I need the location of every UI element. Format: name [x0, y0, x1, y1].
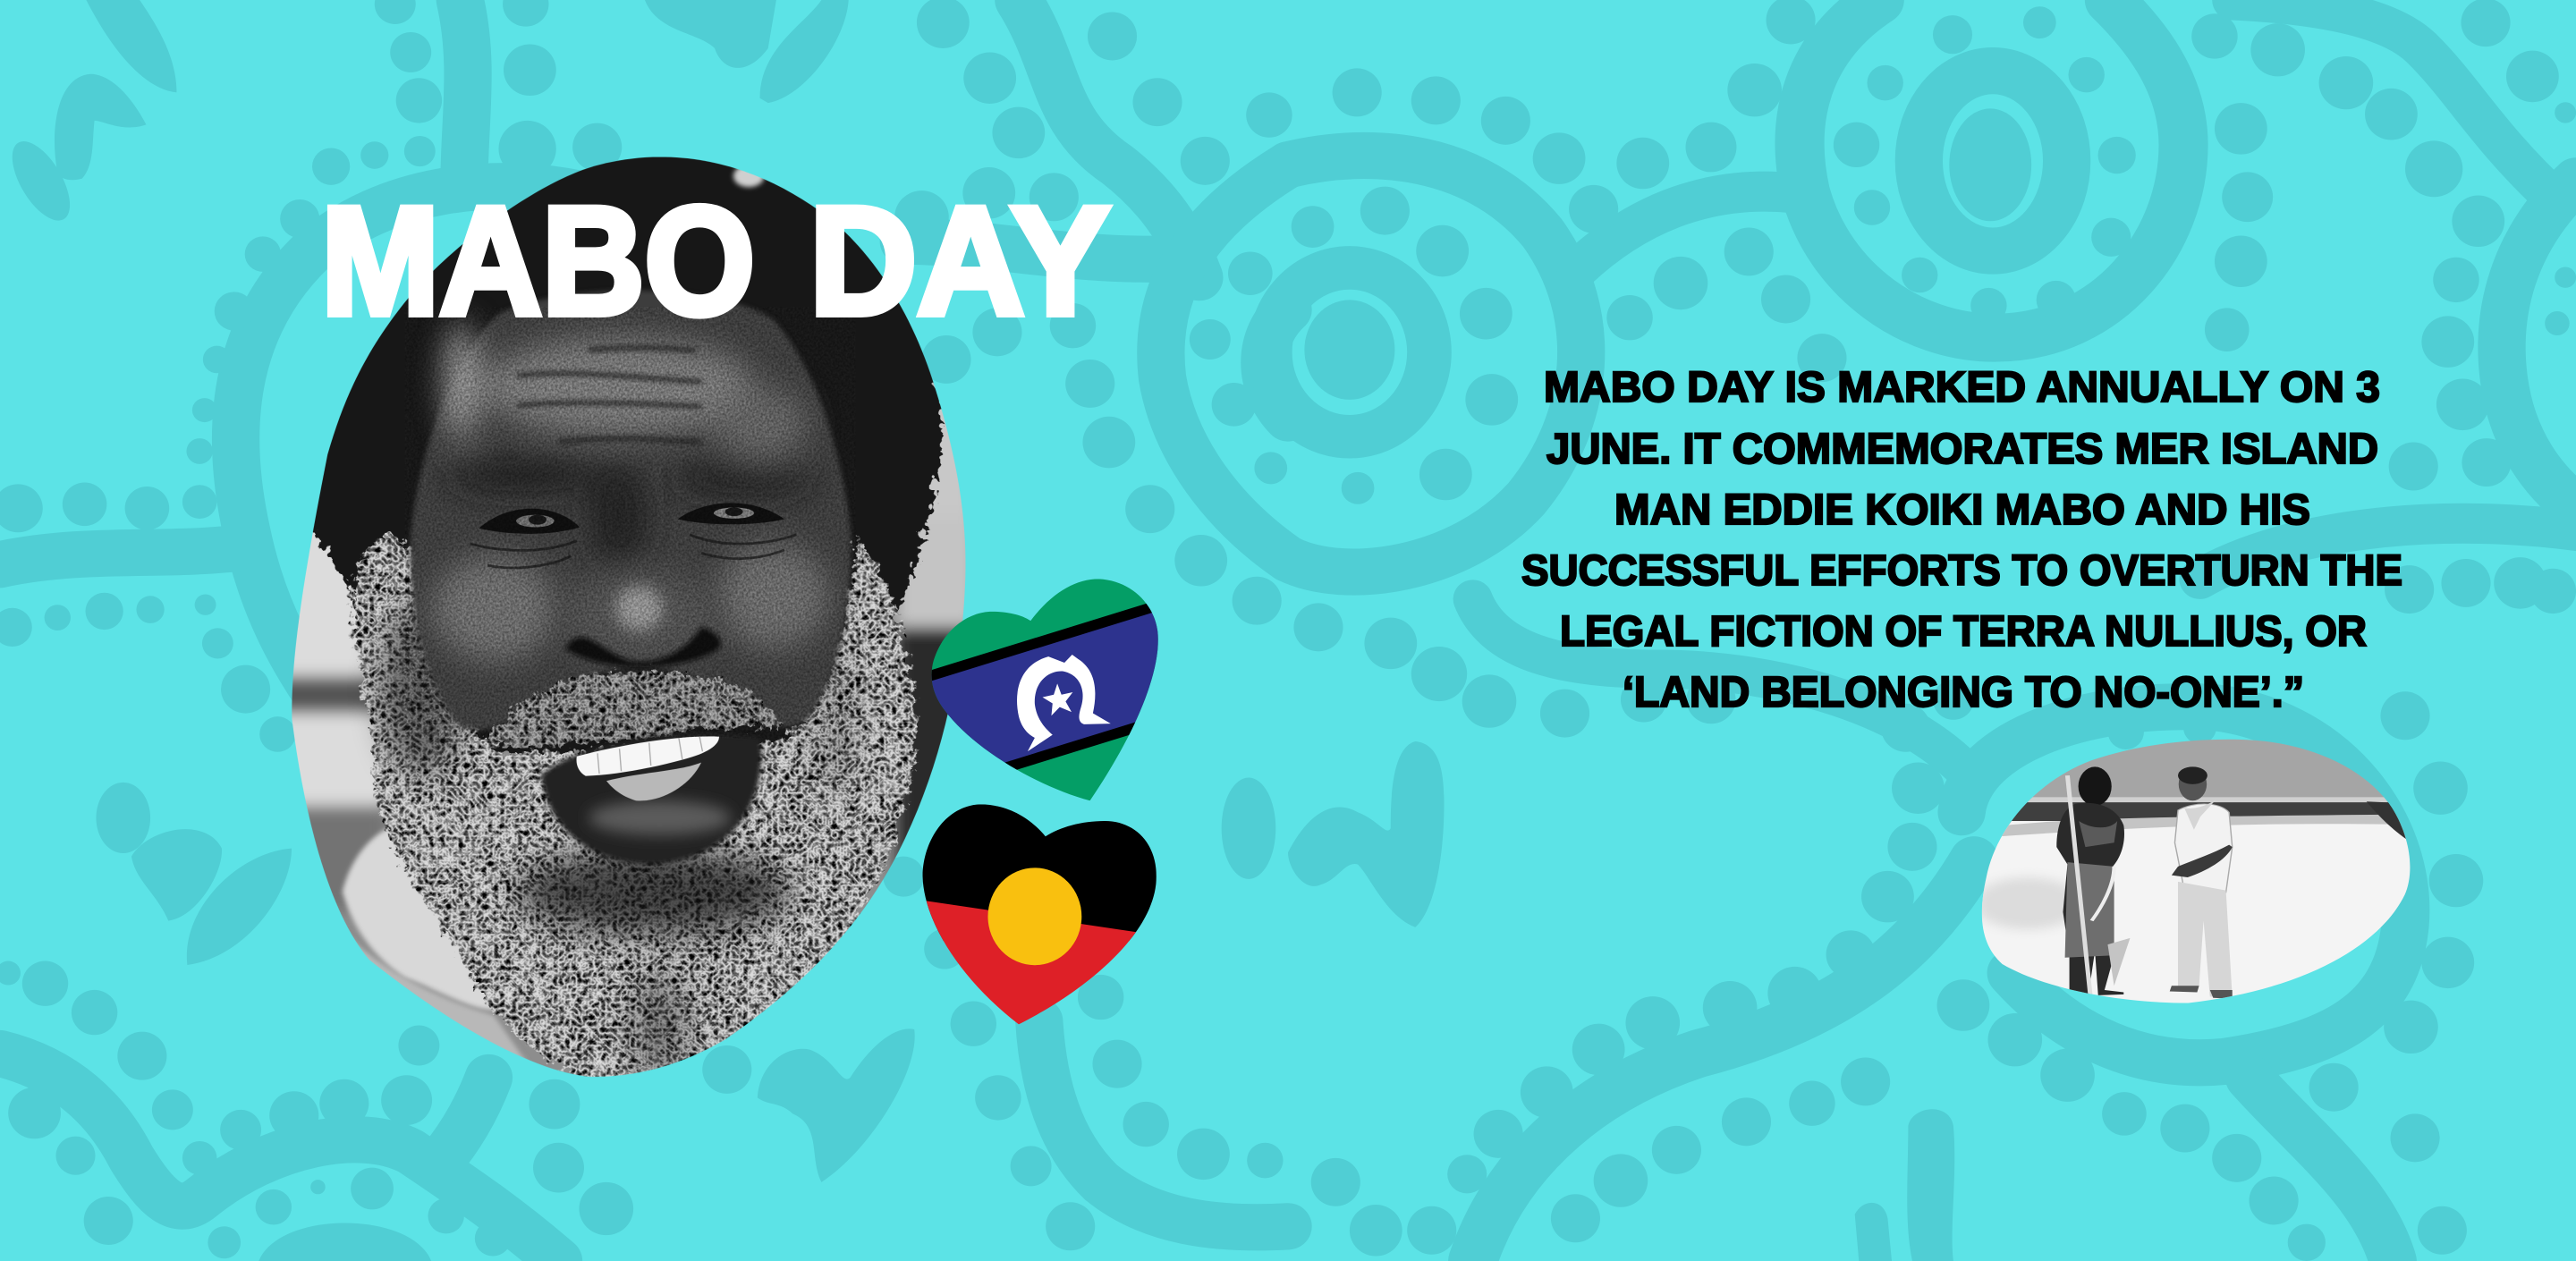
left man — [2056, 766, 2124, 996]
right man — [2170, 766, 2233, 999]
photo: two men on the beach — [1970, 734, 2418, 1007]
beard shadows — [381, 602, 859, 1083]
skin grain — [404, 307, 856, 738]
moustache — [482, 668, 778, 744]
under-eye creases — [470, 535, 796, 568]
text block: description: ‘LAND BELONGING TO NO-ONE’.” — [1623, 669, 2304, 716]
text block: description: JUNE. IT COMMEMORATES MER ISLAND — [1546, 426, 2378, 473]
face — [411, 291, 851, 730]
forehead wrinkles — [517, 348, 701, 442]
teeth — [576, 736, 719, 776]
hair — [305, 142, 936, 750]
text block: description: SUCCESSFUL EFFORTS TO OVERTURN THE — [1521, 547, 2402, 595]
shirt collar — [343, 824, 500, 1010]
background pattern: dots and lines, left half — [0, 0, 1292, 1261]
title — [321, 175, 1110, 347]
background pattern: dots and lines, right half — [1270, 0, 2576, 1261]
emblem: dhari and star — [1017, 655, 1111, 751]
text block: description: MAN EDDIE KOIKI MABO AND HIS — [1614, 487, 2310, 534]
title: DAY — [809, 175, 1110, 347]
text block: description — [1521, 364, 2402, 716]
beard — [350, 531, 912, 1079]
title: MABO — [321, 175, 755, 347]
mouth — [541, 733, 761, 864]
eyes — [479, 503, 784, 534]
icon: Torres Strait Islander flag heart — [932, 580, 1158, 801]
text block: description: LEGAL FICTION OF TERRA NULLIUS, OR — [1560, 608, 2367, 656]
text block: description: MABO DAY IS MARKED ANNUALLY ON 3 — [1544, 364, 2380, 411]
nose — [559, 569, 721, 667]
portrait: Eddie Koiki Mabo — [275, 142, 986, 1089]
icon: Aboriginal flag heart — [923, 804, 1157, 1025]
